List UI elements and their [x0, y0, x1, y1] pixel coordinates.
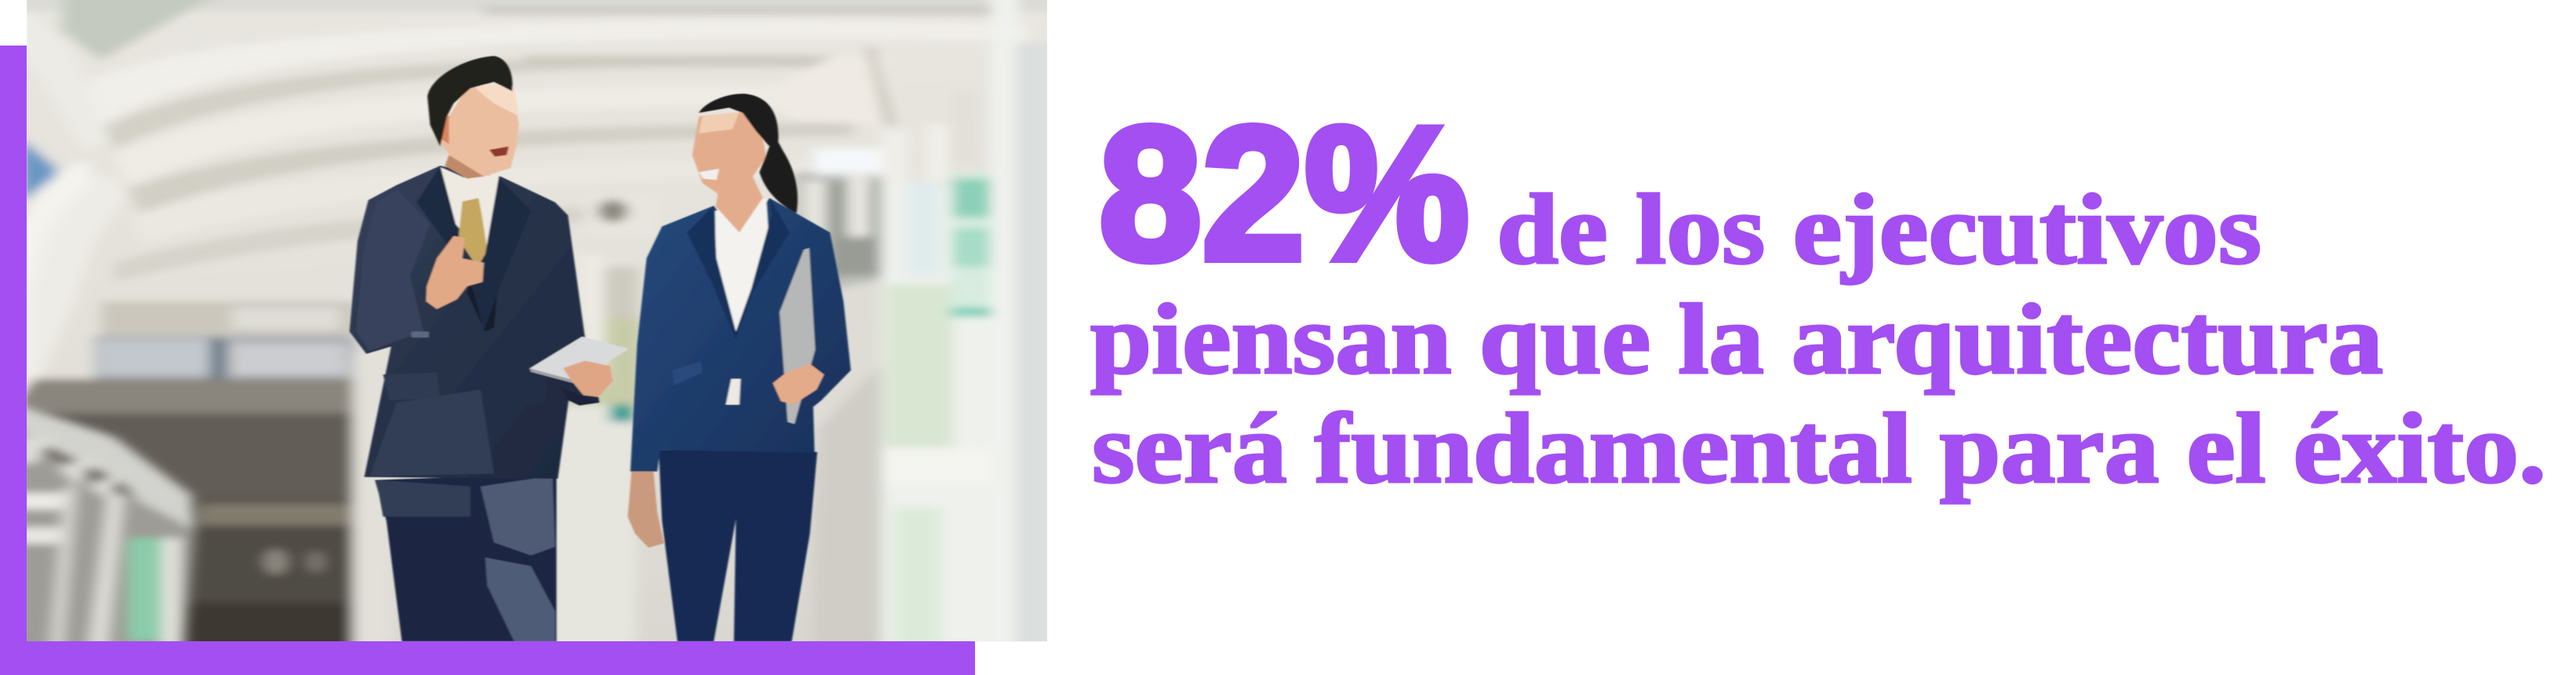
man hand raised: [426, 236, 484, 309]
headline statistic and text: [1090, 88, 2546, 504]
man jacket sleeve end: [561, 388, 599, 406]
woman hair: [699, 93, 798, 213]
woman lapels: [687, 198, 790, 340]
man shirt and tie: [439, 166, 500, 246]
man neck shade: [445, 155, 484, 179]
text line 3: será fundamental para el éxito.: [1092, 392, 2546, 504]
man jacket: [350, 166, 599, 479]
man head: [440, 82, 518, 177]
man lapels: [417, 166, 531, 331]
woman jacket: [631, 198, 851, 472]
left railing: [27, 402, 204, 641]
figure: woman in blue suit: [628, 93, 851, 641]
man hand on tablet: [563, 361, 613, 397]
woman shirt: [715, 198, 769, 338]
statistic: 82%: 82%: [1099, 88, 1469, 300]
woman trousers: [659, 450, 817, 641]
man cuff button detail: [411, 331, 429, 338]
photo background: blurred walkway: [27, 0, 1047, 642]
woman head: [693, 112, 766, 232]
text line 2: piensan que la arquitectura: [1090, 283, 2383, 395]
panel: photo of two executives walking: [27, 0, 1047, 642]
man trousers: [375, 473, 556, 641]
accent: purple bottom bar: [0, 641, 975, 675]
woman left hand: [628, 469, 664, 548]
accent: purple left bar: [0, 46, 27, 675]
text line 1: de los ejecutivos: [1497, 173, 2261, 285]
woman folder: [780, 248, 815, 424]
figure: man in navy suit: [350, 56, 629, 641]
man tablet: [529, 337, 629, 381]
woman hand: [773, 363, 824, 405]
man hair: [428, 56, 512, 146]
